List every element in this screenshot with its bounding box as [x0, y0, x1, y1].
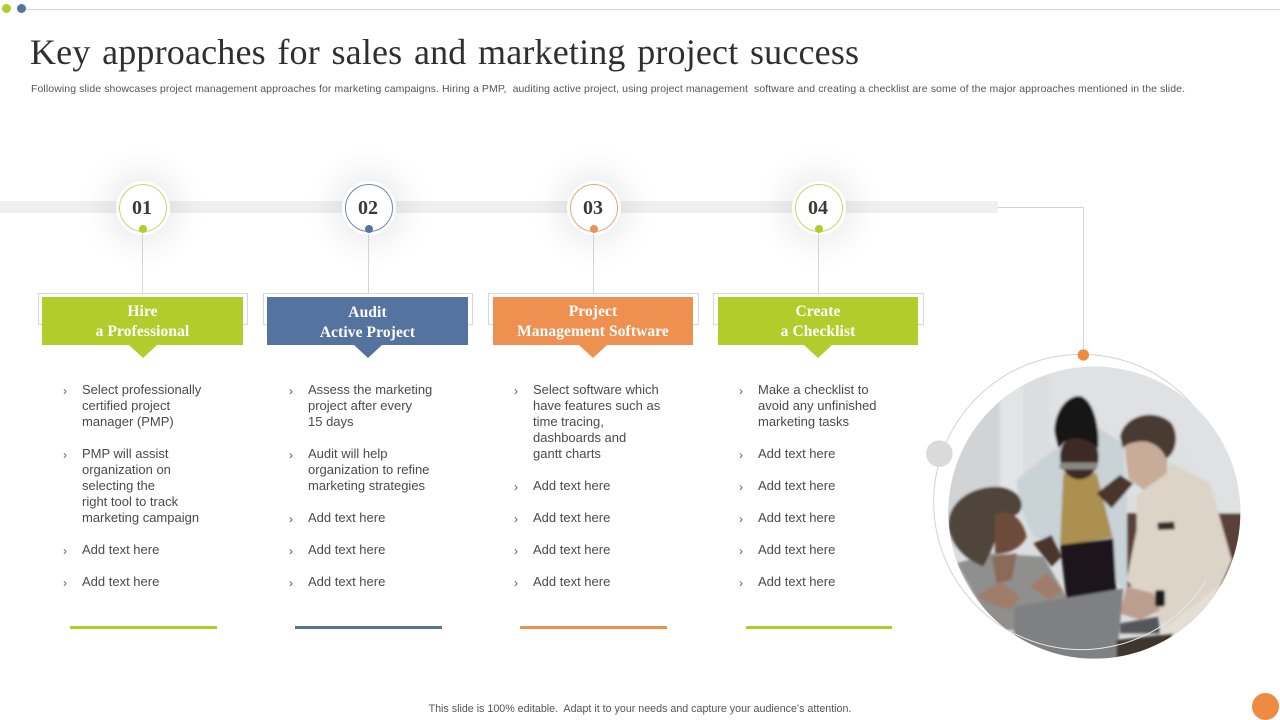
- list: column 2: [289, 382, 432, 590]
- orange node: [1078, 349, 1089, 361]
- list: column 4: ›: [739, 576, 743, 590]
- orange corner circle: [1252, 693, 1279, 720]
- header outline 3: [488, 293, 699, 325]
- list: column 4: Add text here: [758, 574, 835, 588]
- header: Create a Checklist: a Checklist: [781, 323, 855, 340]
- list: column 1: [63, 382, 202, 590]
- outer ring: [934, 354, 1229, 650]
- list: column 4: Add text here: [758, 446, 835, 460]
- header arrow 3: [579, 345, 607, 358]
- list: column 4: ›: [739, 384, 743, 398]
- list: column 3: ›: [514, 544, 518, 558]
- timeline bar: [0, 201, 998, 213]
- underline 1: [70, 626, 217, 629]
- right person: [1127, 463, 1232, 635]
- list: column 4: [739, 382, 877, 590]
- list: column 2: Audit will help organization to refine marketing strategies: [308, 446, 429, 492]
- header outline 2: [263, 293, 473, 325]
- list: column 4: Add text here: [758, 542, 835, 556]
- header: Project Management Software: Project: [569, 303, 617, 320]
- header: Audit Active Project: [267, 297, 468, 345]
- list: column 1: ›: [63, 544, 67, 558]
- header arrow 4: [804, 345, 832, 358]
- header arrow 1: [129, 345, 157, 358]
- connector 4: [818, 234, 819, 294]
- step number 03: [567, 181, 621, 235]
- header outline 4: [713, 293, 924, 325]
- list: column 3: Add text here: [533, 542, 610, 556]
- header: Audit Active Project: Audit: [348, 304, 387, 321]
- list: column 2: Add text here: [308, 542, 385, 556]
- list: column 3: Add text here: [533, 574, 610, 588]
- header arrow 2: [354, 345, 382, 358]
- footer note: This slide is 100% editable. Adapt it to your needs and capture your audience’s attention.: [429, 703, 851, 715]
- subtitle: Following slide showcases project management approaches for marketing campaigns. Hiring a PMP, auditing active project, using project management software and creating a checklist are some of the major approaches mentioned in the slide.: [31, 83, 1185, 95]
- list: column 2: ›: [289, 384, 293, 398]
- step number 03: 03: [583, 197, 603, 219]
- list: column 3: Add text here: [533, 478, 610, 492]
- list: column 3: [514, 382, 660, 590]
- list: column 3: ›: [514, 480, 518, 494]
- list: column 4: Add text here: [758, 478, 835, 492]
- step number 04: 04: [808, 197, 828, 219]
- list: column 2: Assess the marketing project after every 15 days: [308, 382, 432, 428]
- photo illustration: three colleagues around a laptop: [926, 349, 1240, 659]
- header: Hire a Professional: a Professional: [96, 323, 189, 340]
- header: Hire a Professional: [42, 297, 243, 345]
- header outline 1: [38, 293, 248, 325]
- list: column 4: Add text here: [758, 510, 835, 524]
- step number 02: 02: [358, 197, 378, 219]
- top rule with dots: [2, 4, 1280, 13]
- step number 04: [792, 181, 846, 235]
- list: column 1: Select professionally certified project manager (PMP): [82, 382, 201, 428]
- connector 3: [593, 234, 594, 294]
- header: Audit Active Project: Active Project: [320, 324, 415, 341]
- list: column 2: ›: [289, 512, 293, 526]
- header: Create a Checklist: Create: [795, 303, 841, 320]
- step number 01: 01: [132, 197, 152, 219]
- laptop: [1014, 588, 1123, 660]
- list: column 2: ›: [289, 576, 293, 590]
- list: column 3: ›: [514, 384, 518, 398]
- list: column 4: ›: [739, 448, 743, 462]
- sofa: [1123, 513, 1243, 587]
- list: column 2: Add text here: [308, 510, 385, 524]
- list: column 3: ›: [514, 512, 518, 526]
- centre person: [1017, 428, 1127, 590]
- list: column 4: ›: [739, 544, 743, 558]
- list: column 4: ›: [739, 512, 743, 526]
- header: Project Management Software: [493, 297, 693, 345]
- header: Project Management Software: Management Software: [517, 323, 669, 340]
- title: Key approaches for sales and marketing project success: [30, 32, 859, 72]
- photo background: [948, 402, 999, 528]
- left person: [957, 553, 1068, 630]
- header: Hire a Professional: Hire: [127, 303, 158, 320]
- list: column 2: ›: [289, 544, 293, 558]
- list: column 1: ›: [63, 576, 67, 590]
- underline 4: [746, 626, 892, 629]
- connector to photo: [998, 207, 1084, 356]
- list: column 1: ›: [63, 448, 67, 462]
- connector 2: [368, 234, 369, 294]
- list: column 3: ›: [514, 576, 518, 590]
- grey node: [926, 440, 953, 467]
- list: column 3: Add text here: [533, 510, 610, 524]
- ring highlight over photo: [1014, 580, 1207, 650]
- list: column 2: ›: [289, 448, 293, 462]
- list: column 4: Make a checklist to avoid any unfinished marketing tasks: [758, 382, 877, 428]
- step number 01: [116, 181, 170, 235]
- underline 2: [295, 626, 442, 629]
- list: column 1: PMP will assist organization on selecting the right tool to track marketing campaign: [82, 446, 199, 524]
- list: column 4: ›: [739, 480, 743, 494]
- list: column 2: Add text here: [308, 574, 385, 588]
- step number 02: [342, 181, 396, 235]
- underline 3: [520, 626, 667, 629]
- list: column 1: Add text here: [82, 574, 159, 588]
- list: column 1: ›: [63, 384, 67, 398]
- connector 1: [142, 234, 143, 294]
- list: column 3: Select software which have features such as time tracing, dashboards and gantt charts: [533, 382, 660, 460]
- list: column 1: Add text here: [82, 542, 159, 556]
- header: Create a Checklist: [718, 297, 918, 345]
